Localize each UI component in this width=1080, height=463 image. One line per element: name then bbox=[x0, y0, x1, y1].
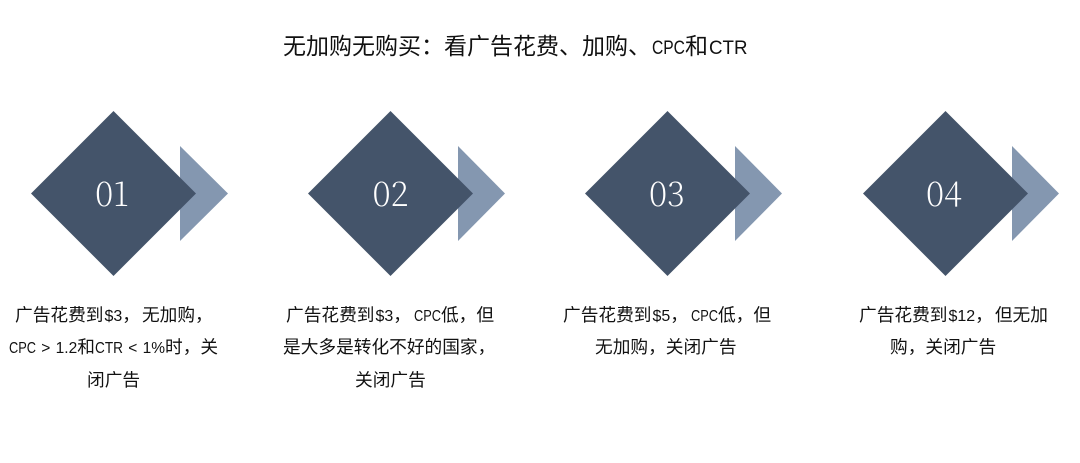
step 03 text: CPC bbox=[691, 308, 718, 325]
title: 无加购无购买：看广告花费、加购、 和 bbox=[283, 33, 708, 59]
step 01 text: CTR bbox=[95, 340, 123, 357]
step 02 text bbox=[283, 305, 495, 390]
step 01 text: 闭广告 bbox=[87, 370, 140, 390]
step 01 icon bbox=[31, 111, 228, 276]
step 02 icon: 02 bbox=[373, 169, 408, 216]
step 01 text: CPC bbox=[9, 340, 36, 357]
step 04 icon: 04 bbox=[926, 169, 962, 216]
title: CPC bbox=[652, 37, 685, 59]
step 01 icon: 01 bbox=[95, 169, 129, 216]
step 03 icon bbox=[585, 111, 782, 276]
step 03 icon: 03 bbox=[649, 169, 685, 216]
step 01 text: 广告花费到$3，无加购， bbox=[15, 305, 213, 325]
title: CTR bbox=[709, 37, 747, 59]
step 04 icon bbox=[863, 111, 1059, 276]
step 02 text: 关闭广告 bbox=[355, 370, 426, 390]
step 04 text: 广告花费到$12，但无加 bbox=[859, 305, 1048, 325]
step 01 text bbox=[9, 305, 218, 390]
step 03 text: 无加购，关闭广告 bbox=[595, 337, 737, 357]
step 04 text: 购，关闭广告 bbox=[890, 337, 996, 357]
step 03 text bbox=[563, 305, 771, 357]
step 04 text bbox=[859, 305, 1048, 357]
step 02 text: 广告花费到$3， 低，但 bbox=[286, 305, 494, 325]
step 01 text: > 1.2和 < 1%时，关 bbox=[41, 337, 218, 357]
step 02 text: CPC bbox=[414, 308, 441, 325]
step 02 icon bbox=[308, 111, 505, 276]
step 02 text: 是大多是转化不好的国家， bbox=[283, 337, 495, 357]
step 03 text: 广告花费到$5， 低，但 bbox=[563, 305, 771, 325]
